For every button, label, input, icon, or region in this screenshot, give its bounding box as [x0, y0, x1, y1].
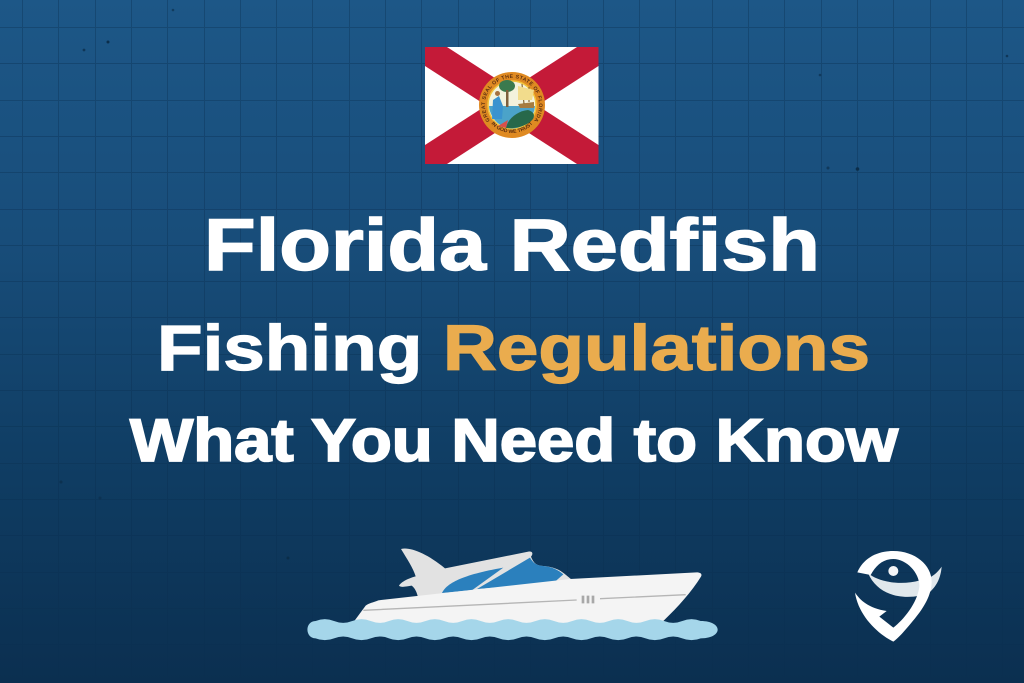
water waves [307, 619, 718, 640]
icon: fish hook logo [855, 551, 942, 642]
logo eye [888, 566, 898, 576]
icon: motor yacht on waves [307, 549, 718, 640]
icon: state seal: IN GOD WE TRUST [491, 122, 532, 133]
icon: state seal: GREAT SEAL OF THE STATE OF FLORIDA [481, 74, 543, 122]
yacht windows [442, 568, 503, 593]
hull stripe and vents [363, 595, 686, 610]
flag of Florida [425, 47, 598, 164]
subtitle: What You Need to Know: What You Need to Know [130, 407, 898, 474]
yacht cabin and radar arch [399, 549, 572, 598]
icon: state seal [479, 72, 545, 138]
logo body [855, 551, 932, 642]
logo fin band [868, 567, 942, 597]
title: Florida Redfish: Florida Redfish [204, 205, 820, 286]
title: Fishing Regulations: Fishing Regulations [157, 312, 870, 384]
yacht hull [354, 572, 701, 624]
